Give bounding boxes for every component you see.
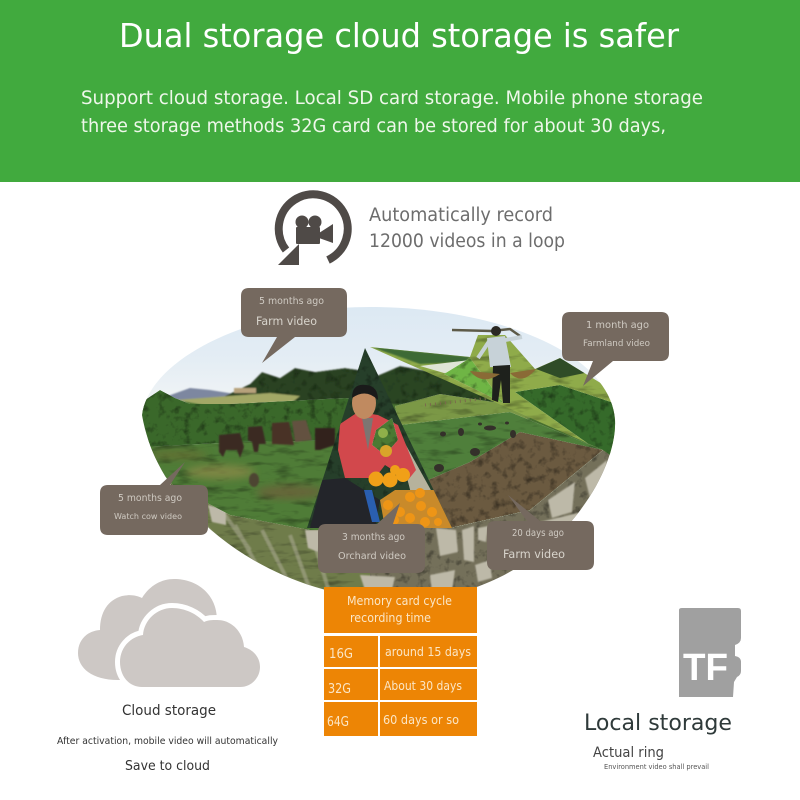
speech bubble: 20 days ago farm video xyxy=(487,495,594,570)
loop recording caption: 12000 videos in a loop xyxy=(369,231,565,252)
orange basket xyxy=(380,488,452,528)
icon: cloud storage xyxy=(78,579,260,687)
cloud storage caption: Save to cloud xyxy=(125,758,210,774)
sky xyxy=(147,307,600,398)
citrus branch xyxy=(372,418,398,457)
far hills and tree line xyxy=(165,366,500,406)
local storage caption xyxy=(584,711,732,771)
farmer wedge xyxy=(370,335,616,455)
speech bubble: 3 months ago orchard video: 3 months ago xyxy=(342,532,405,543)
speech bubble: 20 days ago farm video: 20 days ago xyxy=(512,528,564,539)
right field grass and dirt xyxy=(400,412,603,528)
memory card recording time table: around 15 days xyxy=(385,645,471,659)
oranges in hands xyxy=(368,465,410,488)
orchard farmer triangle xyxy=(307,348,452,528)
man's legs xyxy=(310,478,380,528)
speech bubble: 5 months ago farm video xyxy=(241,288,347,363)
memory card recording time table: 32G xyxy=(328,682,351,697)
loop recording caption xyxy=(369,205,565,252)
man's head xyxy=(352,394,376,419)
speech bubble: 1 month ago farmland video: 1 month ago xyxy=(586,320,649,331)
cloud storage caption xyxy=(57,703,278,774)
memory card recording time table xyxy=(324,587,477,736)
memory card recording time table: 60 days or so xyxy=(383,713,459,727)
icon: TF card: TF xyxy=(683,647,728,689)
stone wall xyxy=(148,440,611,590)
right hill xyxy=(395,394,530,425)
speech bubble: 3 months ago orchard video: Orchard video xyxy=(338,551,406,562)
blue bucket xyxy=(364,490,380,522)
loop recording caption: Automatically record xyxy=(369,205,553,226)
local storage caption: Local storage xyxy=(584,711,732,736)
ground base xyxy=(140,392,603,528)
speech bubble: 5 months ago farm video: 5 months ago xyxy=(259,296,324,307)
speech bubble: 5 months ago watch cow video: Watch cow video xyxy=(114,512,182,521)
farm photo disc xyxy=(130,300,630,610)
icon: loop recording camera xyxy=(278,194,348,265)
memory card recording time table: Memory card cycle xyxy=(347,594,452,608)
header description: Support cloud storage. Local SD card storage. Mobile phone storage xyxy=(81,87,703,109)
title: Dual storage cloud storage is safer xyxy=(119,16,679,55)
cloud storage caption: After activation, mobile video will automatically xyxy=(57,736,278,747)
speech bubble: 3 months ago orchard video xyxy=(318,503,425,573)
cows xyxy=(219,420,335,487)
header description: three storage methods 32G card can be stored for about 30 days, xyxy=(81,115,666,137)
cloud storage caption: Cloud storage xyxy=(122,703,216,719)
speech bubble: 1 month ago farmland video: Farmland video xyxy=(583,339,650,349)
speech bubble: 5 months ago farm video: Farm video xyxy=(256,314,317,328)
icon: TF card xyxy=(679,608,741,697)
local storage caption: Environment video shall prevail xyxy=(604,763,709,771)
speech bubble: 20 days ago farm video: Farm video xyxy=(503,547,565,561)
man's jacket xyxy=(338,412,416,480)
ducks xyxy=(434,422,516,472)
farmer with shoulder pole xyxy=(452,326,536,403)
speech bubble: 5 months ago watch cow video xyxy=(100,462,208,535)
speech bubble: 1 month ago farmland video xyxy=(562,312,669,386)
speech bubble: 5 months ago watch cow video: 5 months ago xyxy=(118,493,182,504)
left pasture xyxy=(150,440,334,530)
header band xyxy=(0,0,800,182)
header description xyxy=(81,87,703,137)
memory card recording time table: 64G xyxy=(327,715,349,730)
memory card recording time table: 16G xyxy=(329,647,353,662)
local storage caption: Actual ring xyxy=(593,745,664,761)
memory card recording time table: recording time xyxy=(350,611,431,625)
fence xyxy=(425,398,490,405)
left orchard xyxy=(142,390,370,450)
memory card recording time table: About 30 days xyxy=(384,679,462,693)
